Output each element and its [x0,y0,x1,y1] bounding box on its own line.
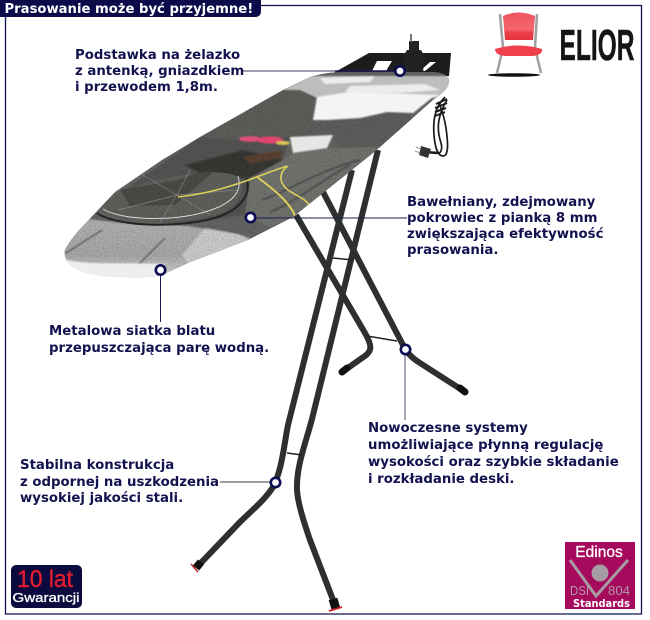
callout: height adjustment: umożliwiające płynną regulację [368,438,603,453]
header banner: Prasowanie może być przyjemne! [4,1,253,17]
lower road [245,147,380,227]
pale stone lip [60,258,165,282]
rear leg with long foot [322,190,462,390]
callout: construction: z odpornej na uszkodzenia [20,475,219,490]
callout: cover: Bawełniany, zdejmowany [407,195,596,210]
badge: Edinos standards: Standards [573,598,630,610]
ironing board with printed cover [64,72,450,278]
top mottled strip [283,76,450,98]
front leg left [197,170,352,567]
callout: iron rest: i przewodem 1,8m. [75,80,218,95]
power cord and plug [415,97,448,158]
callout: mesh: Metalowa siatka blatu [49,324,215,339]
callout: height adjustment: Nowoczesne systemy [368,421,528,436]
rear leg with hook foot [296,215,370,370]
ironing board legs [191,150,465,611]
cobblestone foreground [64,218,252,278]
badge: Edinos standards: Edinos [575,544,623,561]
badge: 10 years warranty: 10 lat [17,566,73,593]
badge: 10 years warranty: Gwarancji [12,591,80,605]
badge: Edinos standards: 804 [608,583,630,598]
bicycle frame [178,166,310,216]
trees [200,90,317,140]
callout: cover: pokrowiec z pianką 8 mm [407,211,597,226]
iron rest with socket and antenna [335,34,451,76]
foot tips [342,368,465,392]
callout: cover: zwiększająca efektywność [407,226,604,242]
bicycle wheel [97,162,248,225]
callout: height adjustment: wysokości oraz szybkie składanie [368,454,619,470]
dark area under basket [185,150,285,178]
callout leader lines [160,71,407,482]
flowers [239,136,290,145]
icon: chair [488,12,542,77]
callout markers [156,66,410,487]
brand logo: Elior [488,12,634,77]
badge: 10 years warranty [11,565,82,608]
badge: Edinos standards: DSI [570,583,589,598]
light puddle [290,135,333,153]
dark street band [127,136,290,223]
callout: construction: wysokiej jakości stali. [20,490,183,506]
front leg right [297,150,378,605]
callout: iron rest: z antenką, gniazdkiem [75,64,244,79]
callout: construction: Stabilna konstrukcja [20,458,174,473]
grain texture [64,72,445,276]
callout: iron rest: Podstawka na żelazko [75,48,240,63]
callout: mesh: przepuszczająca parę wodną. [49,341,269,356]
badge: Edinos standards [565,542,635,610]
basket [243,150,283,164]
callout: cover: prasowania. [407,243,498,258]
white sky [313,92,440,120]
callout: height adjustment: i rozkładanie deski. [368,472,514,487]
cross bars [287,258,397,455]
right hand buildings [380,118,413,148]
